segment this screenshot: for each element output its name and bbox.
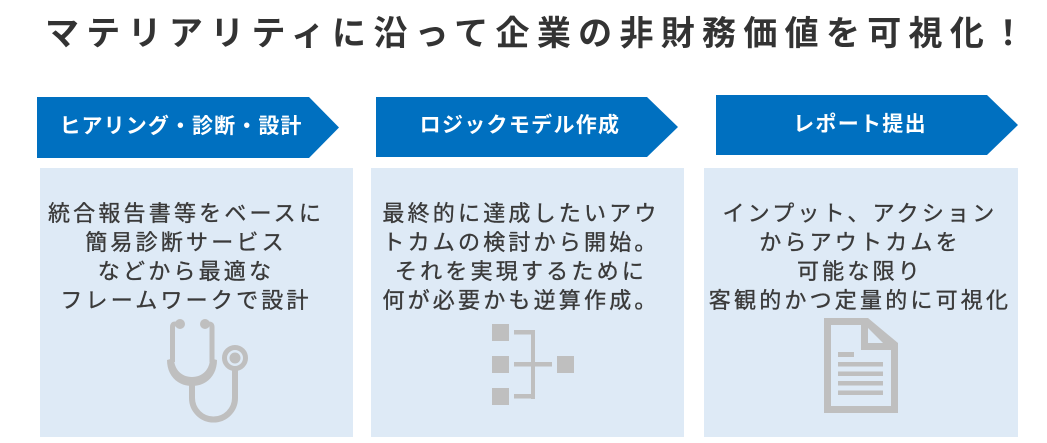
text: report [709,201,1011,313]
text: logic model: 何が必要かも逆算作成。 [382,288,660,313]
text: hearing and diagnosis: 簡易診断サービス [85,230,287,255]
heading: logic model: ロジックモデル作成 [420,114,620,137]
text: hearing and diagnosis: フレームワークで設計 [60,288,312,313]
text: logic model: それを実現するために [395,259,647,284]
panel: hearing and diagnosis [40,168,353,437]
text: report: 可能な限り [797,259,923,284]
text: report: 客観的かつ定量的に可視化 [709,288,1011,313]
text: logic model: 最終的に達成したいアウ [382,201,660,226]
arrow: logic model [376,97,678,157]
text: hearing and diagnosis [48,201,324,313]
text: hearing and diagnosis: 統合報告書等をベースに [48,201,324,226]
text: report: インプット、アクション [722,201,998,226]
panel: logic model [371,168,684,437]
icon: document [824,318,898,413]
icon: logic tree [492,324,574,405]
text: report: からアウトカムを [759,230,961,255]
panel: report [704,168,1018,437]
arrow: report [716,95,1018,155]
text: hearing and diagnosis: などから最適な [98,259,274,284]
text: logic model [382,201,660,313]
heading: hearing and diagnosis: ヒアリング・診断・設計 [59,115,303,138]
icon: stethoscope [167,319,248,422]
text: logic model: トカムの検討から開始。 [382,230,660,255]
arrow: hearing and diagnosis [37,97,339,158]
title: マテリアリティに沿って企業の非財務価値を可視化！ [45,15,1032,53]
heading: report: レポート提出 [793,113,927,136]
